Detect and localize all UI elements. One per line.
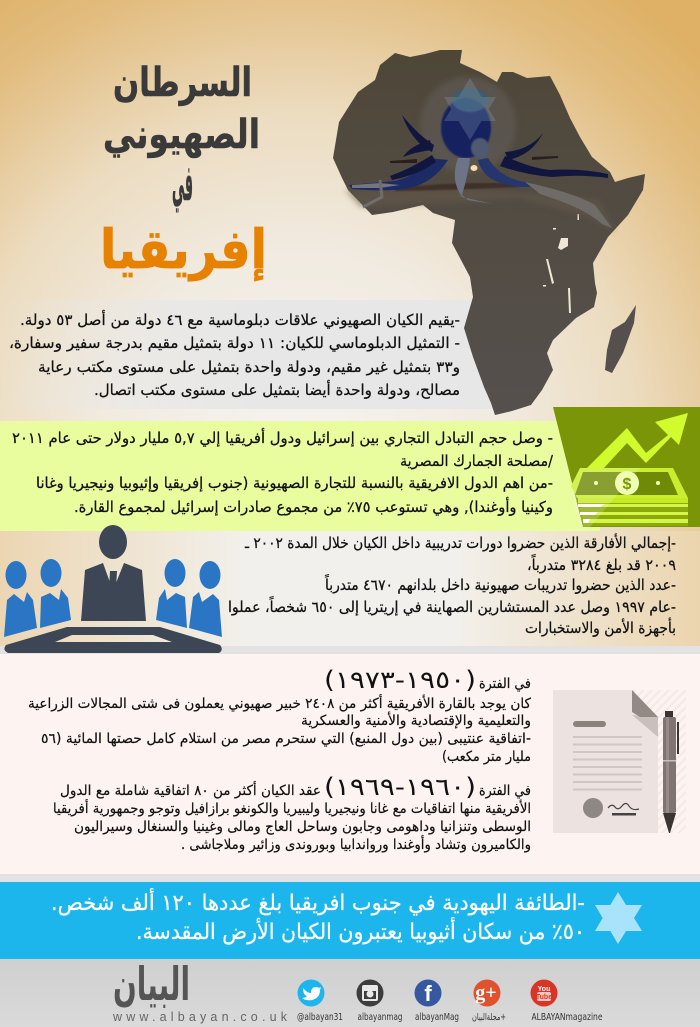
logo: البيان: [113, 957, 190, 1011]
text block: history: الأفريقية منها اتفاقيات مع غانا ونيجيريا وليبيريا والكونغو برازافيل وتوجو وجمهورية أفريقيا: [53, 799, 531, 817]
tentacles: [349, 115, 612, 228]
tumour body: [441, 98, 491, 158]
Madagascar: [605, 305, 636, 373]
title: في: [172, 154, 193, 212]
side figures: [4, 559, 222, 637]
period 1950-1973: (١٩٥٠-١٩٧٣): [324, 666, 476, 694]
text block: history: والكاميرون وتشاد وأوغندا ورواندابيا وبوروندى وزائير وملاجاشى .: [181, 835, 531, 853]
lakes: [543, 214, 579, 313]
text block: diplomatic relations: [9, 310, 460, 399]
panel: diplomatic relations background: [0, 300, 500, 409]
text block: history: -اتفاقية عنتيبى (بين دول المنبع) التي ستحرم مصر من استلام كامل حصتها المائية (٥٦: [41, 731, 531, 747]
text block: trade: - وصل حجم التبادل التجاري بين إسرائيل ودول أفريقيا إلي ٥,٧ مليار دولار حتى عام ٢٠١١: [12, 428, 553, 448]
divider band: [0, 874, 700, 882]
website: www.albayan.co.uk: [112, 1010, 288, 1024]
title: [100, 60, 267, 281]
text block: Jewish community: -الطائفة اليهودية في جنوب افريقيا بلغ عددها ١٢٠ ألف شخص.: [51, 888, 585, 916]
title line 4: إفريقيا: [100, 218, 267, 281]
social: google plus: +مجلةالبيان: [472, 1012, 506, 1023]
social: youtube: Tube: [536, 994, 552, 1001]
text block: training: بأجهزة الأمن والاستخبارات: [525, 617, 676, 637]
icon: people at meeting table: [4, 525, 222, 653]
text block: training: -عدد الذين حضروا تدريبات صهيونية داخل بلدانهم ٤٦٧٠ متدرباً: [324, 574, 676, 594]
coin: [615, 471, 639, 495]
social: google plus: g+: [475, 982, 497, 1004]
title line 1: السرطان: [113, 60, 252, 106]
rising arrow: [586, 413, 688, 469]
divider band: [0, 646, 700, 654]
text block: diplomatic relations: مصالح، ودولة واحدة أيضا بتمثيل على مستوى مكتب اتصال.: [94, 380, 460, 399]
panel: Jewish community: [0, 882, 700, 959]
icon: money and rising arrow: [553, 407, 700, 527]
social: instagram: albayanmag: [358, 1012, 402, 1023]
social: instagram: [356, 980, 402, 1023]
map of Africa with tumour: [333, 50, 645, 415]
logo: [112, 957, 288, 1024]
text block: history: الوسطى وتنزانيا وداهومى وجابون وساحل العاج ومالى وغينيا والسنغال وسيراليون: [74, 819, 531, 835]
text block: Jewish community: ٥٠٪ من سكان أثيوبيا يعتبرون الكيان الأرض المقدسة.: [136, 917, 585, 945]
seal: [583, 798, 603, 818]
glowing speck: [470, 165, 478, 171]
signature: [608, 804, 639, 810]
page: [553, 690, 658, 833]
period 1960-1969: (١٩٦٠-١٩٦٩): [324, 773, 476, 801]
heading bar: [573, 721, 606, 727]
social: youtube: ALBAYANmagazine: [532, 1012, 603, 1023]
Africa silhouette: [333, 50, 645, 415]
text block: trade: [12, 428, 554, 517]
star of David on tumour: [444, 78, 496, 140]
highlight diagonal: [571, 468, 640, 527]
tumour halo: [420, 77, 516, 173]
icon: document and pen: [553, 690, 686, 833]
central figure: [81, 525, 146, 621]
social: facebook: f: [424, 981, 432, 1006]
text block: trade: وكينيا وأوغندا), وهي تستوعب ٧٥٪ من مجموع صادرات إسرائيل لمجموع القارة.: [74, 497, 553, 517]
text block: Jewish community: [51, 888, 585, 945]
period 1960-1969: عقد الكيان أكثر من ٨٠ اتفاقية شاملة مع الدول: [60, 781, 321, 799]
social: facebook: albayanMag: [415, 1012, 459, 1023]
text block: diplomatic relations: -يقيم الكيان الصهيوني علاقات دبلوماسية مع ٤٦ دولة من أصل ٥٣ دولة.: [20, 310, 460, 330]
text block: training: ٢٠٠٩ قد بلغ ٣٢٨٤ متدرباً،: [527, 554, 676, 574]
panel: history: [0, 654, 700, 874]
period 1950-1973: في الفترة: [479, 676, 531, 692]
banknote stack stripes: [577, 498, 688, 526]
footer: [0, 959, 700, 1027]
social: youtube: You: [538, 986, 550, 993]
social: facebook: [414, 980, 459, 1023]
icon: money and rising arrow: $: [623, 476, 632, 493]
icon background: [553, 407, 700, 527]
period 1960-1969: [60, 773, 531, 801]
text block: diplomatic relations: - التمثيل الدبلوماسي للكيان: ١١ دولة بتمثيل مقيم بدرجة سفير وسفارة،: [9, 334, 460, 353]
table: [4, 627, 222, 653]
title line 2: الصهيوني: [103, 112, 260, 158]
text block: trade: /مصلحة الجمارك المصرية: [400, 452, 554, 470]
panel: trade: [0, 421, 600, 531]
page fold: [632, 715, 658, 737]
document lines: [573, 736, 642, 790]
social: twitter: [297, 980, 343, 1023]
text block: history: كان يوجد بالقارة الأفريقية أكثر من ٢٤٠٨ خبير صهيوني يعملون فى شتى المجالات الزراعية: [28, 694, 531, 712]
social: youtube: [530, 980, 603, 1023]
social: google plus: [472, 980, 506, 1023]
text block: training: [228, 533, 676, 637]
pen: [663, 711, 679, 833]
text block: training: -عام ١٩٩٧ وصل عدد المستشارين الصهاينة في إريتريا إلى ٦٥٠ شخصاً، عملوا: [228, 596, 676, 617]
text block: history: مليار متر مكعب): [442, 749, 531, 765]
panel: training: [0, 531, 700, 646]
text block: diplomatic relations: و٣٣ بتمثيل غير مقيم، ودولة واحدة بتمثيل على مستوى مكتب رعاية: [38, 358, 460, 376]
hatched backdrop: [632, 690, 686, 833]
text block: history: [28, 666, 531, 853]
icon: star: [595, 892, 642, 944]
social: twitter: @albayan31: [297, 1012, 343, 1023]
ground glow beneath tumour: [345, 188, 615, 232]
text block: history: والتعليمية والإقتصادية والأمنية والعسكرية: [301, 711, 531, 729]
period 1960-1969: في الفترة: [479, 783, 531, 799]
banknote: [571, 468, 688, 498]
text block: trade: -من اهم الدول الافريقية بالنسبة للتجارة الصهيونية (جنوب إفريقيا وإثيوبيا ونيجيريا وغانا: [36, 474, 553, 492]
text block: training: -إجمالي الأفارقة الذين حضروا دورات تدريبية داخل الكيان خلال المدة ٢٠٠٢ ـ: [244, 533, 676, 553]
